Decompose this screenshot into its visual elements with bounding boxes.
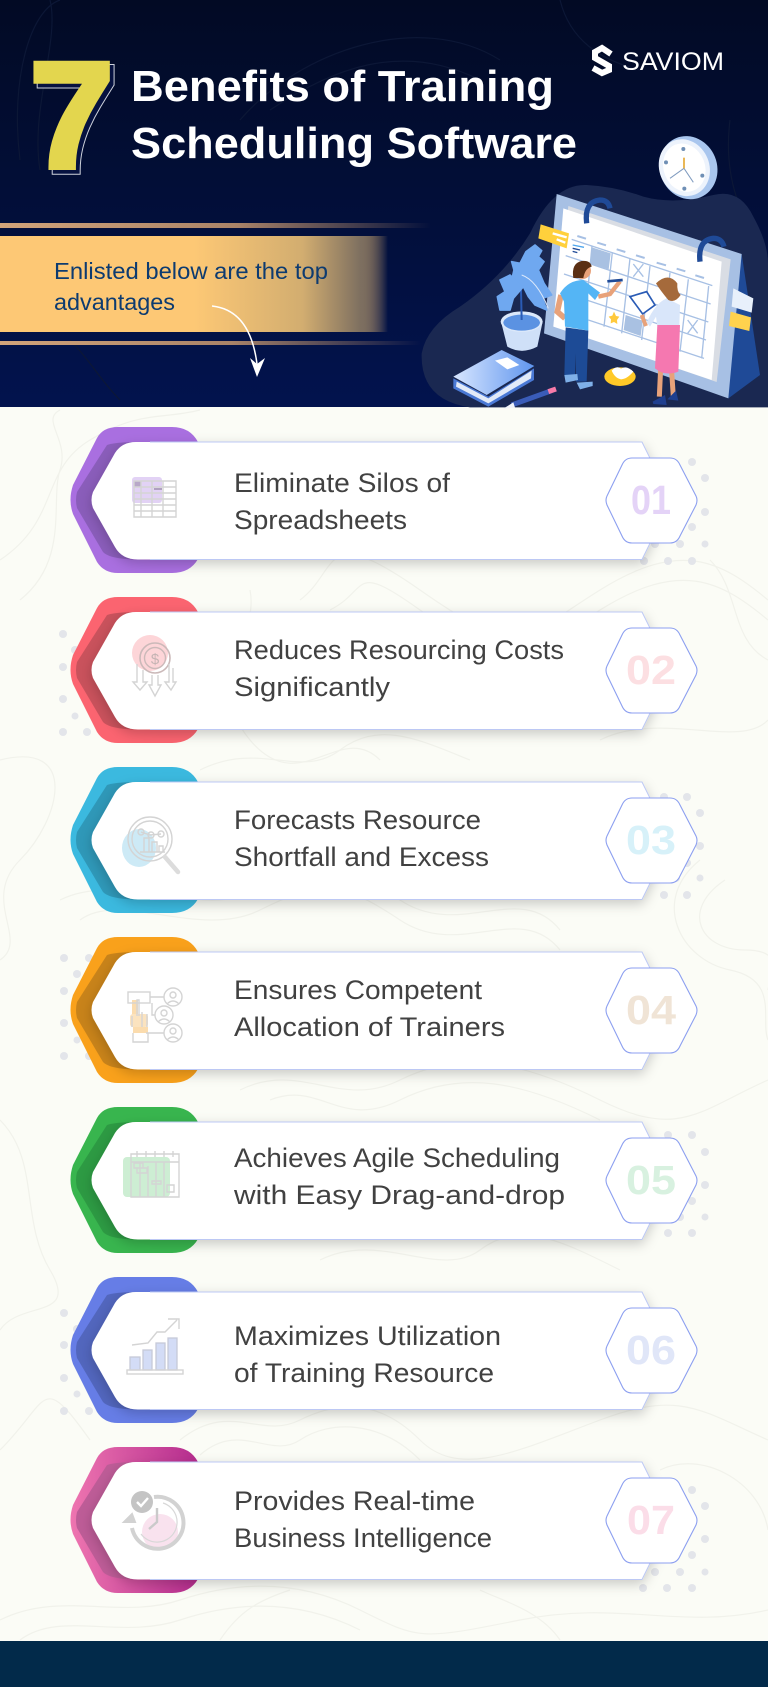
heading: benefit 05: Achieves Agile Scheduling [234, 1143, 560, 1173]
heading: benefit 01: Spreadsheets [234, 505, 407, 535]
dots decoration: row 03 [660, 793, 704, 899]
man [557, 261, 623, 389]
number 04: 04 [626, 987, 676, 1033]
heading: benefit 06 [234, 1321, 501, 1388]
panel: benefit 03 [70, 767, 697, 913]
icon: real-time clock [124, 1491, 183, 1550]
heading: benefit 04 [234, 975, 505, 1042]
heading: benefit 06: Maximizes Utilization [234, 1321, 501, 1351]
decorative line upper [0, 223, 431, 228]
footer bar [0, 1641, 768, 1687]
large numeral 7: 7 [30, 31, 113, 199]
heading: benefit 03 [234, 805, 489, 872]
icon: falling costs [132, 635, 176, 696]
heading: benefit 04: Ensures Competent [234, 975, 483, 1005]
icon: gantt calendar [123, 1151, 179, 1197]
logo: Saviom: SAVIOM [622, 48, 724, 76]
dots decoration: row 04 [60, 954, 93, 1060]
heading: benefit 07 [234, 1486, 492, 1553]
arrow [212, 306, 265, 377]
panel: benefit 04 [70, 937, 697, 1083]
icon: spreadsheet [132, 477, 176, 517]
dots decoration: row 05 [664, 1131, 709, 1237]
panel: benefit 02 [70, 597, 697, 743]
panel: benefit 01 [70, 427, 697, 573]
wall clock [650, 127, 727, 208]
heading: benefit 03: Shortfall and Excess [234, 842, 489, 872]
subtitle text [54, 258, 328, 315]
panel: benefit 06 [70, 1277, 697, 1423]
dots decoration: row 01 [640, 458, 709, 565]
heading: benefit 06: of Training Resource [234, 1358, 494, 1388]
subtitle band [0, 236, 388, 332]
subtitle text: Enlisted below are the top [54, 258, 328, 284]
illustration: people planning on a calendar [422, 127, 768, 409]
icon: magnifier with chart [122, 817, 178, 872]
number 06: 06 [626, 1327, 676, 1373]
heading: benefit 03: Forecasts Resource [234, 805, 481, 835]
coin [604, 367, 636, 386]
potted plant [497, 245, 552, 351]
number 03: 03 [626, 817, 676, 863]
dots decoration: row 02 [59, 630, 91, 736]
number 01: 01 [631, 477, 671, 523]
icon: growth chart [127, 1319, 183, 1374]
title [131, 62, 577, 168]
header background [0, 0, 768, 407]
desk calendar [538, 194, 760, 398]
title: Scheduling Software [131, 119, 577, 168]
dots decoration: row 06 [60, 1309, 93, 1415]
large numeral 7: 7 [34, 35, 117, 203]
header contour pattern [17, 0, 768, 400]
title: Benefits of Training [131, 62, 554, 111]
book [453, 350, 534, 407]
heading: benefit 07: Provides Real-time [234, 1486, 475, 1516]
number 07: 07 [627, 1497, 675, 1543]
icon: allocation [128, 988, 182, 1042]
number 02: 02 [626, 647, 676, 693]
heading: benefit 05 [233, 1143, 565, 1210]
page background [0, 407, 768, 1641]
number 05: 05 [626, 1157, 676, 1203]
heading: benefit 02: Reduces Resourcing Costs [234, 635, 564, 665]
large numeral 7: 7 [34, 35, 117, 203]
panel: benefit 07 [70, 1447, 697, 1593]
pencil [503, 389, 556, 409]
heading: benefit 02 [234, 635, 564, 702]
panel: benefit 05 [70, 1107, 697, 1253]
heading: benefit 07: Business Intelligence [234, 1523, 492, 1553]
background contour pattern [0, 410, 768, 1640]
heading: benefit 04: Allocation of Trainers [234, 1012, 505, 1042]
subtitle text: advantages [54, 289, 175, 315]
illustration backdrop [422, 185, 768, 407]
heading: benefit 02: Significantly [234, 672, 391, 702]
heading: benefit 05: with Easy Drag-and-drop [233, 1180, 565, 1210]
icon: falling costs: $ [151, 651, 160, 668]
woman [630, 277, 681, 405]
header [0, 0, 768, 409]
heading: benefit 01 [234, 468, 451, 535]
decorative line lower [0, 341, 421, 345]
heading: benefit 01: Eliminate Silos of [234, 468, 451, 498]
dots decoration: row 07 [639, 1486, 709, 1592]
